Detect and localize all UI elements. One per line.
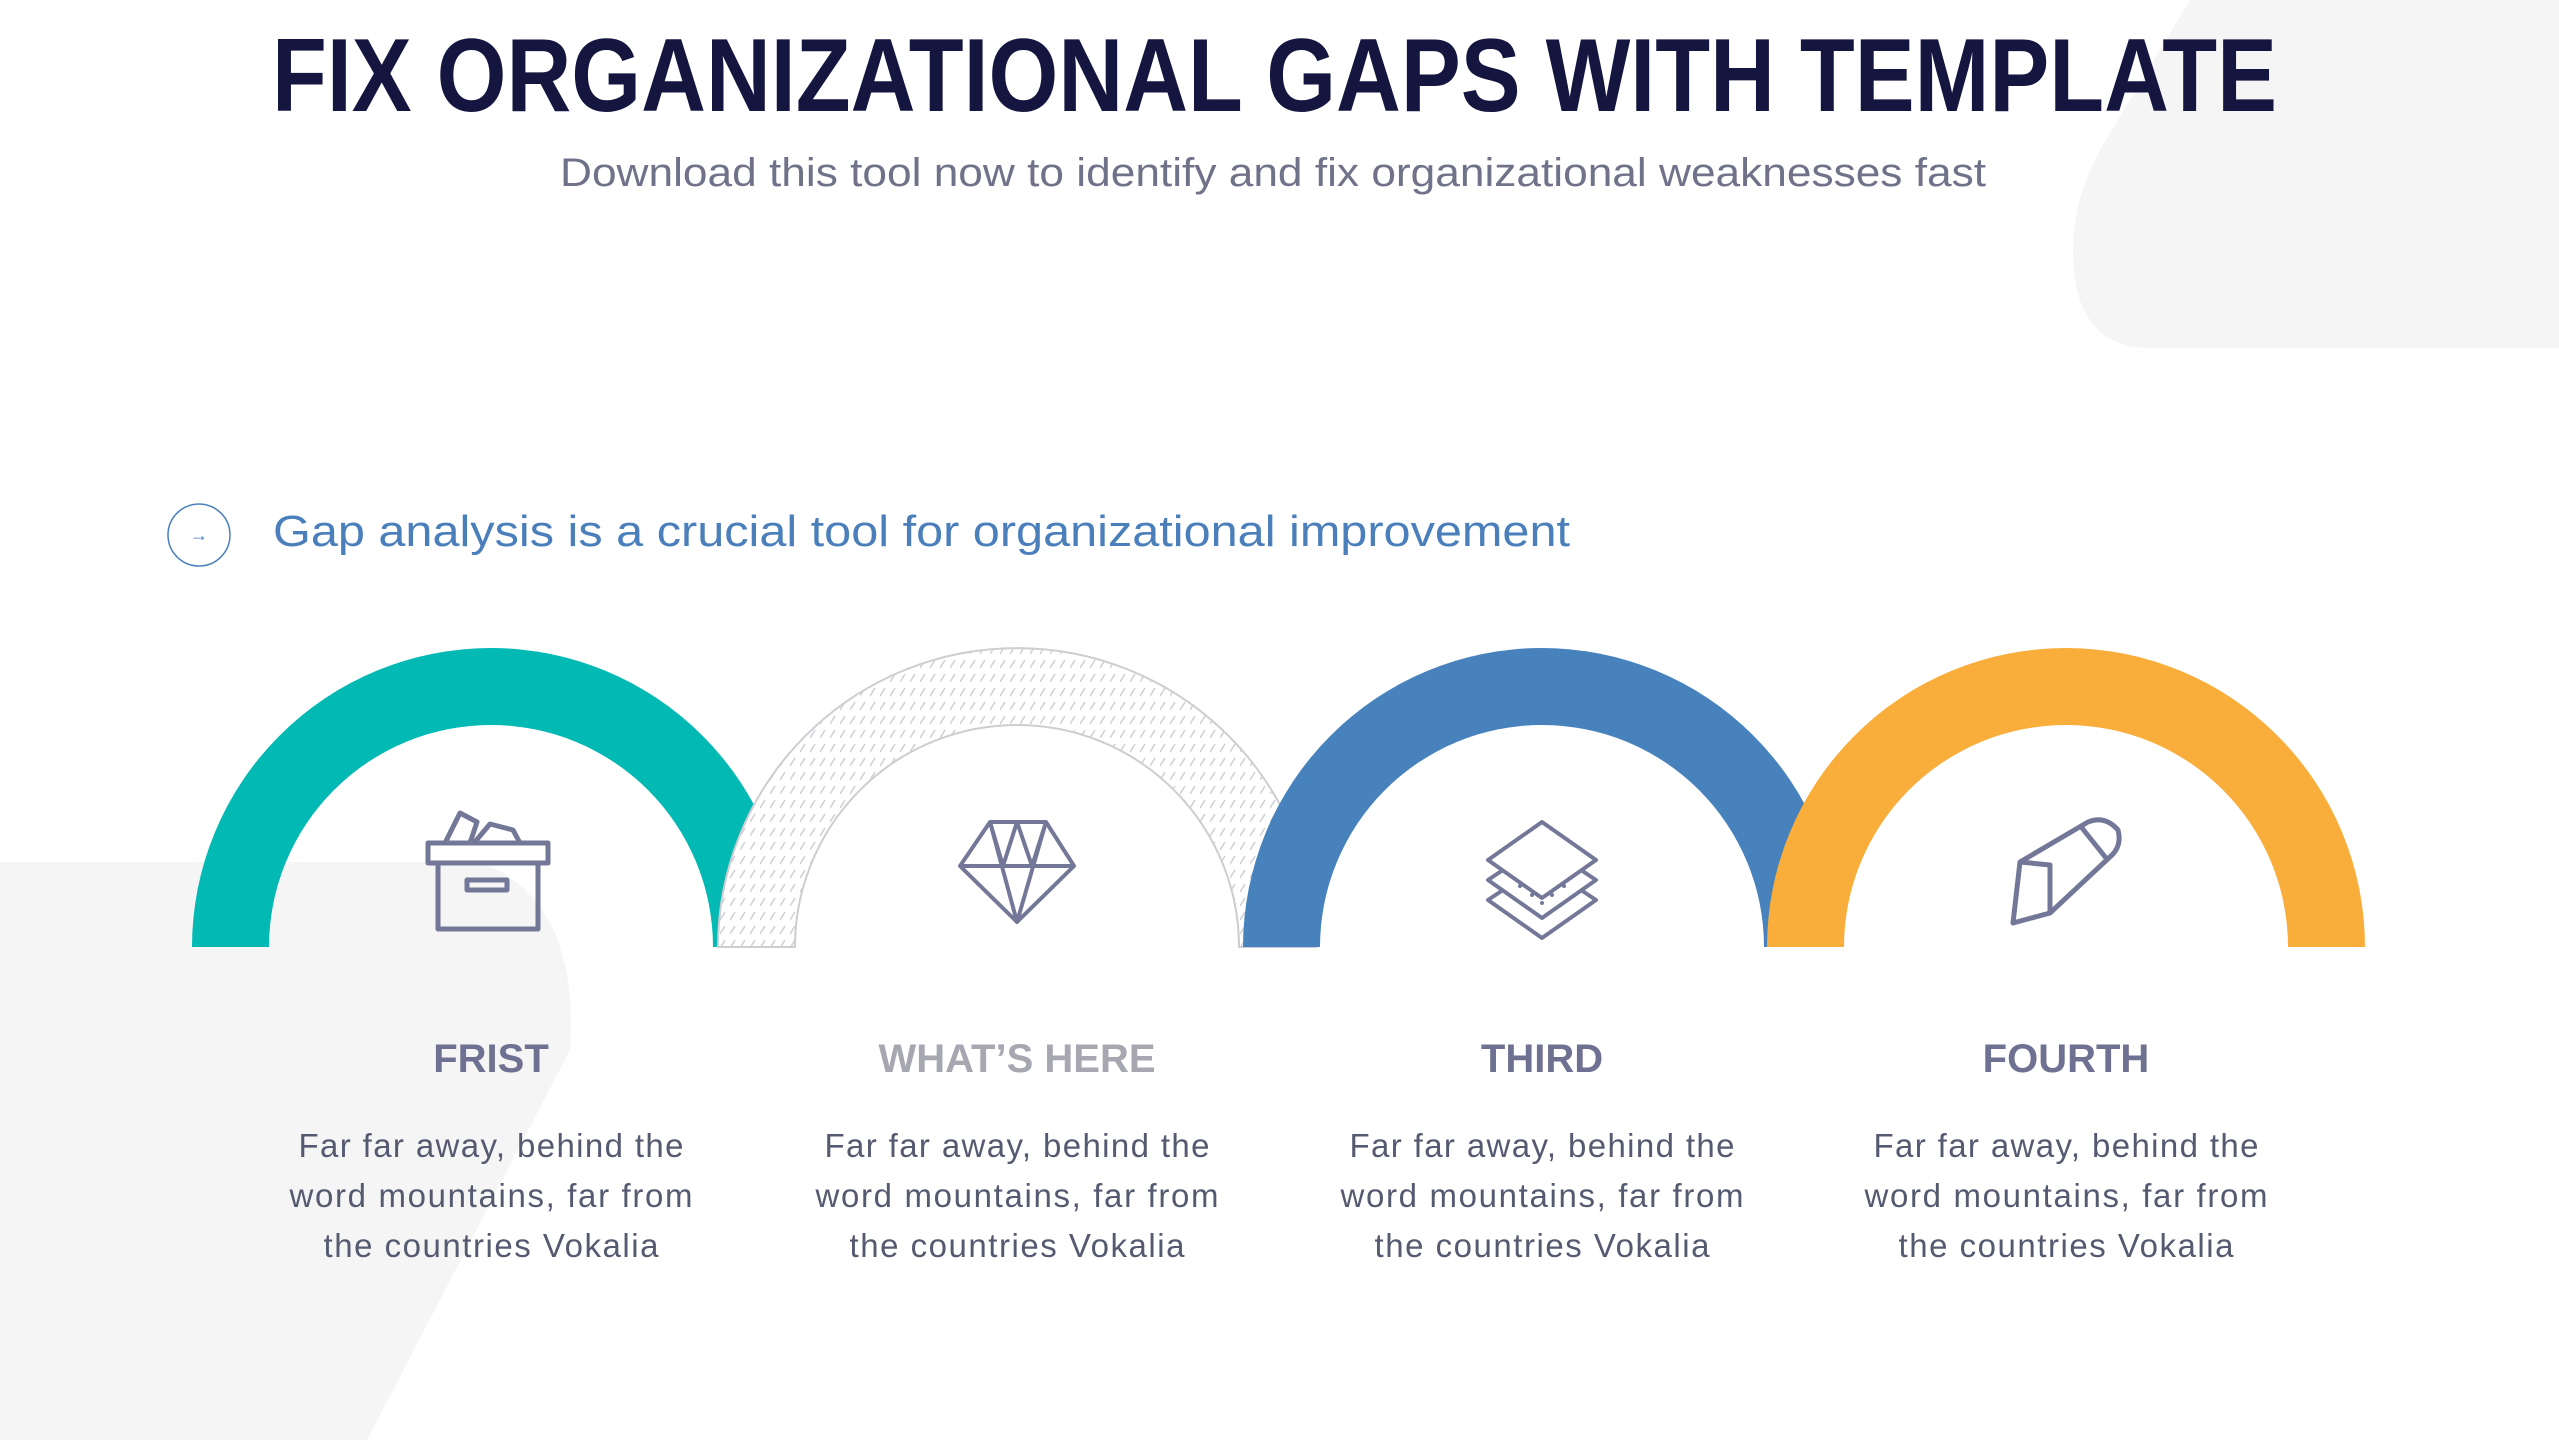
intro line with arrow icon: [168, 504, 1570, 566]
headings: FOURTH: [1983, 1037, 2149, 1081]
body texts: the countries Vokalia: [1374, 1227, 1710, 1264]
arch 2: hatched gray: [718, 648, 1316, 947]
headings: FRIST: [433, 1037, 549, 1081]
body texts: word mountains, far from: [288, 1177, 692, 1214]
body texts: word mountains, far from: [1340, 1177, 1744, 1214]
body texts: the countries Vokalia: [1898, 1227, 2234, 1264]
headings: THIRD: [1481, 1037, 1603, 1081]
body texts: Far far away, behind the: [298, 1127, 684, 1164]
subtitle: Download this tool now to identify and fix organizational weaknesses fast: [560, 151, 1986, 195]
body texts: Far far away, behind the: [1350, 1127, 1734, 1164]
background shape: top right: [2073, 0, 2559, 348]
body texts: word mountains, far from: [814, 1177, 1218, 1214]
icon: diamond: [960, 822, 1074, 922]
headings: WHAT’S HERE: [878, 1037, 1156, 1081]
intro line with arrow icon: Gap analysis is a crucial tool for organizational improvement: [273, 507, 1570, 556]
icon: layers: [1488, 822, 1596, 938]
body texts: [288, 1127, 2268, 1264]
icon: archive box: [428, 813, 548, 929]
intro line with arrow icon: →: [190, 525, 208, 545]
body texts: Far far away, behind the: [824, 1127, 1210, 1164]
arch 1: teal: [192, 648, 790, 947]
icon: pencil: [2013, 820, 2119, 923]
body texts: Far far away, behind the: [1874, 1127, 2258, 1164]
arch 4: orange: [1767, 648, 2365, 947]
arch 3: blue: [1243, 648, 1841, 947]
title: FIX ORGANIZATIONAL GAPS WITH TEMPLATE: [272, 18, 2277, 134]
background shape: bottom left: [0, 862, 571, 1440]
body texts: the countries Vokalia: [850, 1227, 1185, 1264]
headings: [433, 1037, 2149, 1081]
body texts: the countries Vokalia: [324, 1227, 659, 1264]
body texts: word mountains, far from: [1864, 1177, 2268, 1214]
